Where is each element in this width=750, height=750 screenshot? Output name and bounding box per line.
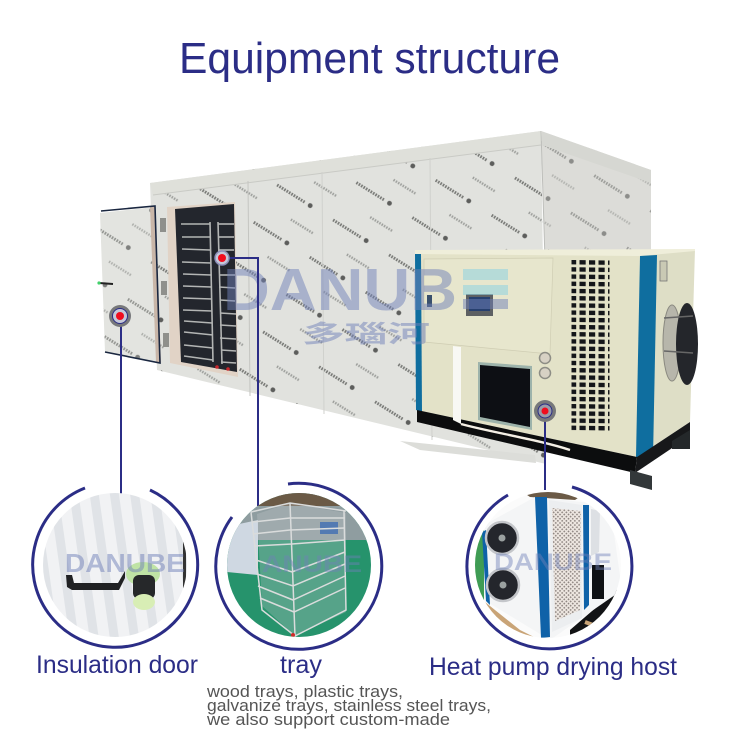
watermark: DANUBE — [223, 257, 508, 348]
marker: tray — [215, 251, 229, 265]
photo: tray rack: ANUBE — [262, 551, 362, 578]
photo: host unit — [475, 492, 620, 638]
description: tray materials: we also support custom-made — [206, 710, 450, 729]
heat pump drying host unit — [415, 249, 698, 490]
photo: tray rack — [225, 490, 375, 640]
label: tray: tray — [280, 651, 322, 679]
photo: door handle — [40, 490, 190, 640]
label: insulation door: Insulation door — [36, 651, 198, 679]
photo: door handle: DANUBE — [65, 548, 185, 578]
description: tray materials: wood trays, plastic trays, — [206, 682, 403, 701]
photo: host unit: DANUBE — [494, 549, 612, 576]
leader line: door — [120, 316, 122, 494]
description: tray materials: galvanize trays, stainless steel trays, — [207, 696, 491, 715]
open insulation door — [97, 206, 161, 363]
panel: heat pump host — [429, 487, 677, 681]
circular ring: door — [33, 488, 198, 647]
marker: host — [534, 400, 556, 422]
watermark: DANUBE: DANUB — [223, 257, 457, 323]
drying room cabinet — [150, 131, 651, 464]
leader line: tray — [222, 258, 258, 506]
panel: tray — [206, 483, 491, 729]
door opening with tray rack — [160, 202, 238, 377]
marker: door — [109, 305, 131, 327]
leader line: host — [544, 411, 546, 490]
circular ring: host — [467, 487, 632, 649]
description: tray materials — [206, 682, 491, 729]
watermark: DANUBE: 多瑙河 — [302, 321, 430, 348]
circular ring: tray — [216, 483, 382, 649]
title: Equipment structure — [179, 34, 560, 83]
label: heat pump drying host: Heat pump drying host — [429, 653, 677, 681]
panel: insulation door — [33, 488, 198, 679]
